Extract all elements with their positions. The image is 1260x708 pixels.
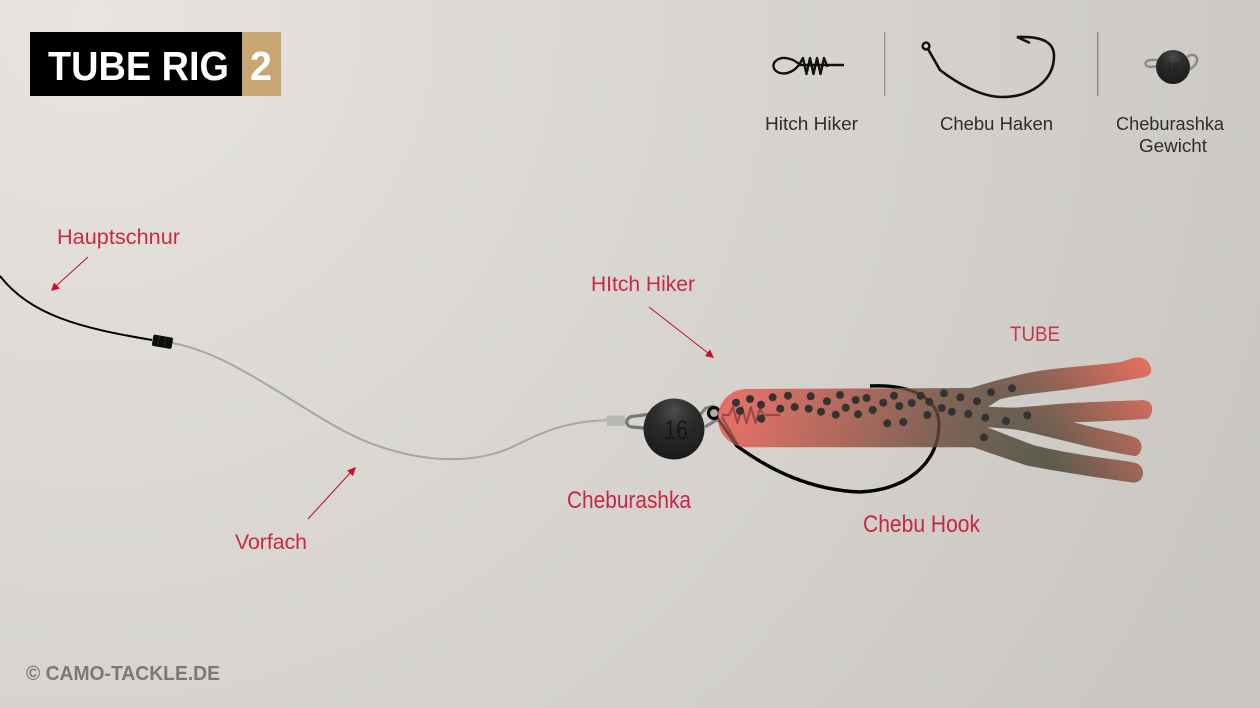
legend label: cheburashka gewicht: Cheburashka: [1116, 114, 1225, 134]
title badge: [30, 32, 281, 96]
icon: cheburashka weight: 16: [1167, 59, 1179, 75]
wire loop left: [627, 414, 652, 428]
hook seen through tube: [718, 389, 940, 447]
swivel sleeve: [598, 416, 625, 426]
arrow: Vorfach: [308, 467, 356, 519]
icon: hitch hiker: [773, 58, 844, 74]
arrow: Hauptschnur: [51, 257, 88, 291]
label: Hitch Hiker: HItch Hiker: [591, 273, 695, 296]
label: Vorfach: Vorfach: [235, 531, 307, 554]
label: TUBE: TUBE: [1010, 323, 1060, 346]
label: Cheburashka: Cheburashka: [567, 487, 692, 514]
label: Chebu Hook: Chebu Hook: [863, 511, 981, 538]
copyright: © CAMO-TACKLE.DE: [26, 663, 220, 685]
hitch hiker seen through tube: [722, 407, 780, 445]
title text: TUBE RIG: [48, 43, 229, 89]
arrow: Hitch Hiker: [649, 307, 714, 358]
weight number: 16: [664, 415, 688, 445]
weight ball: [644, 398, 704, 460]
legend: cheburashka gewicht: Gewicht: [1139, 136, 1207, 156]
wire loop right: [699, 406, 718, 427]
rig: cheburashka weight: [598, 398, 720, 460]
legend: chebu haken: [923, 37, 1054, 134]
legend label: chebu haken: Chebu Haken: [940, 114, 1053, 134]
main line: [0, 276, 152, 340]
ring: [708, 408, 720, 418]
rig: chebu hook: [714, 386, 939, 492]
line connector knot: [152, 334, 173, 349]
legend label: hitch hiker: Hitch Hiker: [765, 114, 858, 134]
title number: 2: [250, 43, 272, 89]
label: Hauptschnur: Hauptschnur: [57, 226, 180, 249]
legend: hitch hiker: [765, 58, 858, 134]
legend: cheburashka gewicht: [1116, 50, 1225, 156]
tube dots: [732, 384, 1031, 441]
leader line: [172, 343, 607, 459]
tube lure body: [714, 358, 1152, 492]
icon: chebu hook: [928, 37, 1054, 97]
